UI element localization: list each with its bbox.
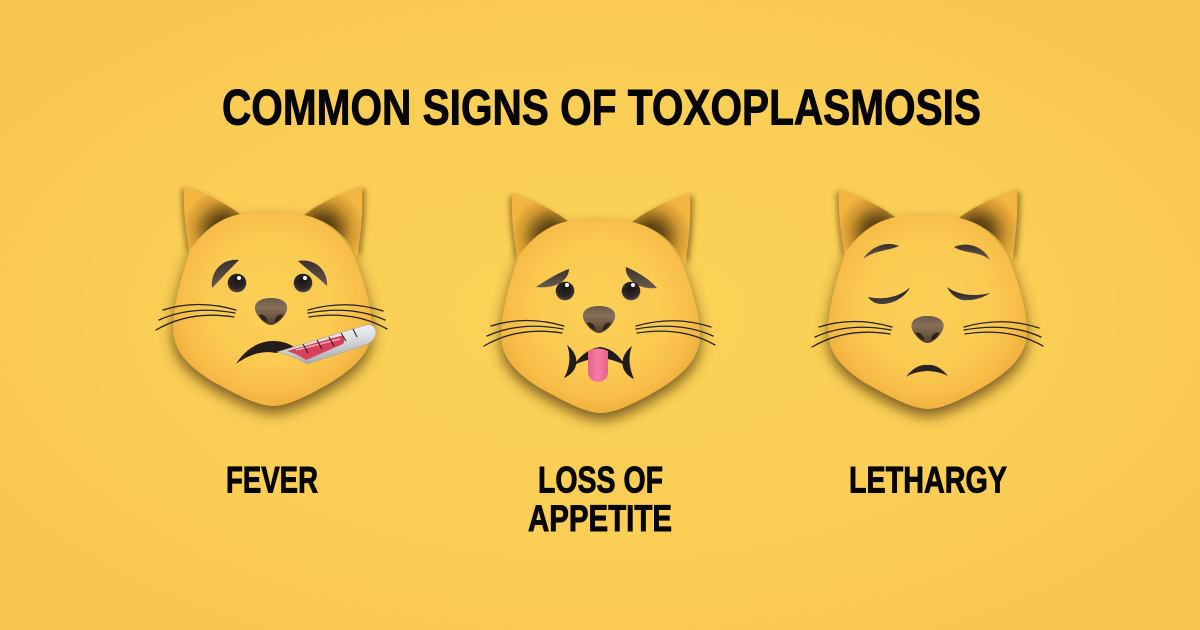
whiskers <box>484 320 715 346</box>
label: loss of appetite <box>528 460 672 539</box>
title: COMMON SIGNS OF TOXOPLASMOSIS <box>222 80 981 136</box>
nose <box>583 306 615 333</box>
cat icon: fever <box>156 187 387 413</box>
eyes <box>556 282 640 300</box>
right eyebrow <box>954 245 990 260</box>
mouth <box>564 345 634 379</box>
tongue <box>588 348 608 382</box>
left eyebrow <box>863 244 899 259</box>
label: fever: FEVER <box>226 460 318 500</box>
mouth <box>906 365 948 377</box>
cat icon: loss of appetite <box>484 194 715 420</box>
whiskers <box>156 304 387 330</box>
eyes <box>228 274 312 292</box>
cat icon: lethargy <box>812 190 1043 416</box>
mouth <box>236 341 296 364</box>
nose <box>911 316 944 343</box>
whiskers <box>812 322 1043 347</box>
nose <box>255 298 287 325</box>
right eyebrow <box>626 267 657 288</box>
right eyebrow <box>298 261 327 286</box>
left eyebrow <box>212 260 239 288</box>
thermometer <box>277 325 376 364</box>
left eyebrow <box>536 269 569 287</box>
label: loss of appetite: LOSS OF <box>538 460 663 500</box>
label: loss of appetite: APPETITE <box>528 498 672 539</box>
label: lethargy: LETHARGY <box>849 460 1007 500</box>
closed eyes <box>868 287 990 304</box>
